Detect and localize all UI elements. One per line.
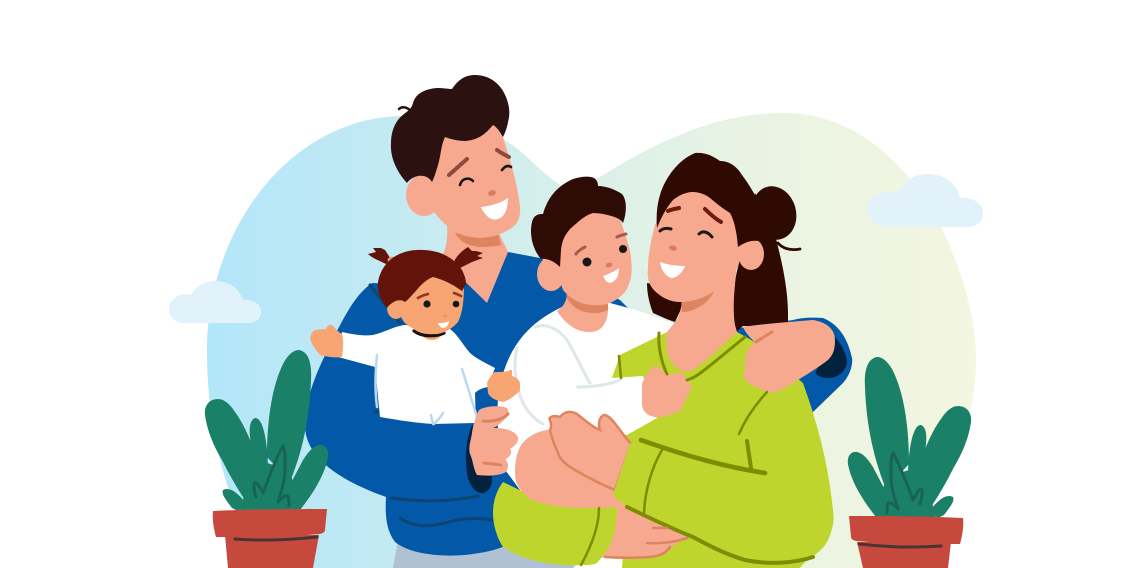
woman: eyebrows bbox=[668, 208, 721, 222]
man: eyes bbox=[460, 166, 511, 185]
man: trousers bbox=[393, 540, 575, 568]
plant: leaf veins bbox=[254, 446, 289, 506]
man: dark sleeve behind hand bbox=[466, 425, 492, 493]
woman: ear bbox=[738, 238, 764, 270]
boy: shirt lines bbox=[515, 326, 620, 424]
girl: collar bbox=[414, 331, 444, 336]
man: sweater bbox=[305, 252, 852, 556]
man: hair bbox=[391, 75, 509, 183]
girl: hair ties bbox=[388, 257, 460, 271]
man: face bbox=[420, 115, 520, 238]
girl: face bbox=[398, 265, 464, 334]
man: neck shadow bbox=[455, 232, 501, 247]
plant: right pot body bbox=[857, 542, 951, 568]
boy: smile bbox=[603, 268, 619, 283]
man: neck bbox=[441, 225, 508, 303]
man: fingers bbox=[469, 406, 518, 476]
woman: bottom white gap bbox=[573, 555, 632, 568]
woman: lower sleeve bbox=[493, 482, 617, 565]
girl: eyebrows bbox=[418, 293, 461, 298]
boy bbox=[497, 177, 690, 520]
man: nose bbox=[487, 189, 497, 197]
man: sweater lines bbox=[370, 285, 492, 526]
man: hand on shoulder bbox=[743, 320, 835, 392]
plant: pot body bbox=[225, 535, 319, 568]
boy: neck bbox=[557, 295, 608, 332]
woman: sleeve folds bbox=[581, 440, 813, 565]
man: hand finger line bbox=[756, 332, 772, 342]
girl: nose bbox=[443, 314, 447, 318]
woman: neck bbox=[666, 255, 738, 372]
plant: right leaves bbox=[848, 357, 971, 518]
boy: face bbox=[553, 200, 632, 305]
girl: dress lines bbox=[376, 355, 477, 424]
boy: hand bbox=[642, 366, 692, 417]
woman: hair bbox=[657, 153, 759, 247]
plant: right pot rim bbox=[849, 516, 963, 544]
woman: smile bbox=[660, 262, 685, 278]
woman: eyes bbox=[660, 228, 712, 237]
girl: neck bbox=[414, 326, 445, 340]
woman: lower hand bbox=[585, 500, 687, 558]
woman: face bbox=[648, 180, 742, 302]
girl: smile bbox=[438, 321, 449, 328]
girl: right ponytail bbox=[453, 247, 483, 268]
man: dark arm shadow bbox=[815, 337, 847, 378]
plant: right leaf veins bbox=[887, 453, 922, 513]
woman: nose bbox=[669, 245, 677, 251]
man: finger lines bbox=[483, 414, 508, 465]
woman: bun bbox=[746, 181, 802, 245]
man: ear bbox=[406, 174, 442, 216]
plant: pot line bbox=[235, 537, 317, 540]
girl: left hand bbox=[310, 325, 343, 357]
woman: hair strand bbox=[778, 243, 800, 250]
girl: hair bbox=[378, 250, 466, 308]
plant: leaves bbox=[205, 350, 328, 511]
girl: ear bbox=[387, 297, 405, 319]
girl bbox=[310, 247, 520, 424]
man: hand on boy bbox=[466, 406, 518, 493]
boy: eyebrows bbox=[576, 234, 626, 254]
woman: neck lines and sweater folds bbox=[619, 333, 767, 473]
plant: right bbox=[848, 357, 971, 568]
woman: lower hand lines bbox=[605, 528, 687, 558]
boy: hair bbox=[531, 177, 626, 267]
boy: leg bbox=[515, 425, 632, 508]
woman: forearm sleeve bbox=[613, 443, 700, 520]
man: eyebrows bbox=[449, 150, 509, 175]
boy: sleeve front bbox=[580, 376, 657, 435]
boy: ear bbox=[537, 257, 565, 291]
woman: neck shadow bbox=[681, 288, 716, 312]
man: smile bbox=[481, 198, 508, 220]
girl: eyes bbox=[423, 300, 431, 308]
woman: torso bbox=[600, 332, 834, 568]
woman: hand on leg bbox=[550, 412, 631, 490]
girl: left ponytail bbox=[368, 248, 392, 264]
girl: dress bbox=[338, 325, 495, 424]
plant: right pot line bbox=[859, 544, 941, 547]
boy: nose bbox=[605, 262, 613, 268]
man bbox=[305, 75, 852, 568]
background blob bbox=[207, 113, 976, 568]
cloud: left bbox=[169, 281, 261, 323]
woman: back hair bbox=[647, 193, 788, 333]
boy: eyes bbox=[582, 258, 592, 266]
plant: pot rim bbox=[213, 509, 327, 537]
girl: right hand bbox=[487, 370, 520, 402]
boy: sleeve line bbox=[578, 380, 620, 387]
boy: neck shadow bbox=[566, 294, 608, 313]
cloud: right bbox=[867, 174, 983, 227]
boy: shirt bbox=[497, 302, 690, 520]
plant: left bbox=[205, 350, 328, 568]
man: hair curl bbox=[399, 107, 411, 111]
